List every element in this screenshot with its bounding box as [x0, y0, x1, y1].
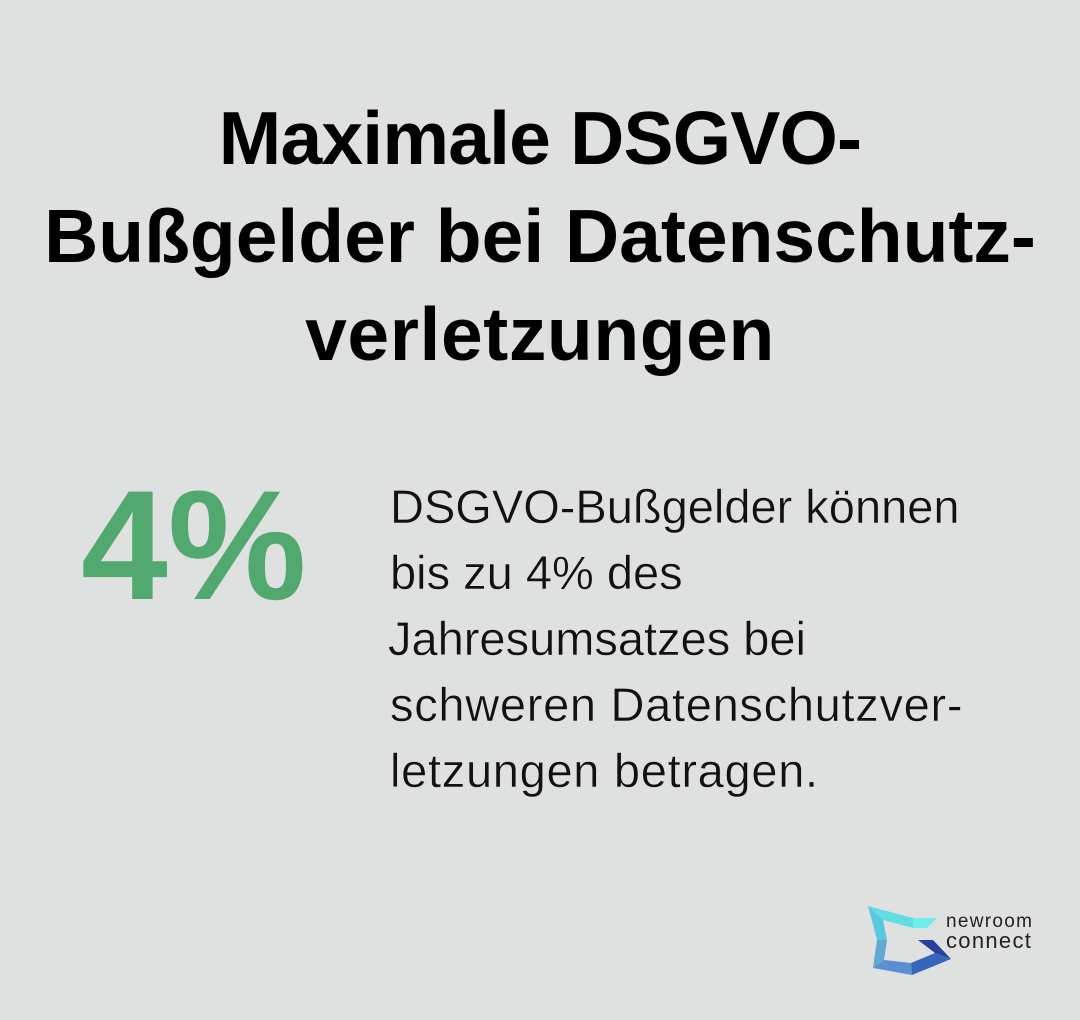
logo: newroom connect [868, 906, 1033, 975]
big statistic: 4%: 4% [81, 459, 306, 633]
description text: letzungen betragen. [390, 744, 819, 797]
logo wordmark: newroom [946, 911, 1033, 932]
description text: DSGVO-Bußgelder können [390, 480, 960, 533]
logo: newroom connect: connect [946, 928, 1032, 953]
title: Maximale DSGVO- [219, 96, 861, 180]
title: verletzungen [305, 292, 775, 376]
title [44, 96, 1036, 376]
description text: Jahresumsatzes bei [388, 612, 806, 665]
description text: schweren Datenschutzver- [390, 678, 963, 731]
description text: bis zu 4% des [390, 546, 683, 599]
description text [388, 480, 963, 797]
icon: logo mark [868, 906, 951, 975]
title: Bußgelder bei Datenschutz- [44, 194, 1036, 278]
